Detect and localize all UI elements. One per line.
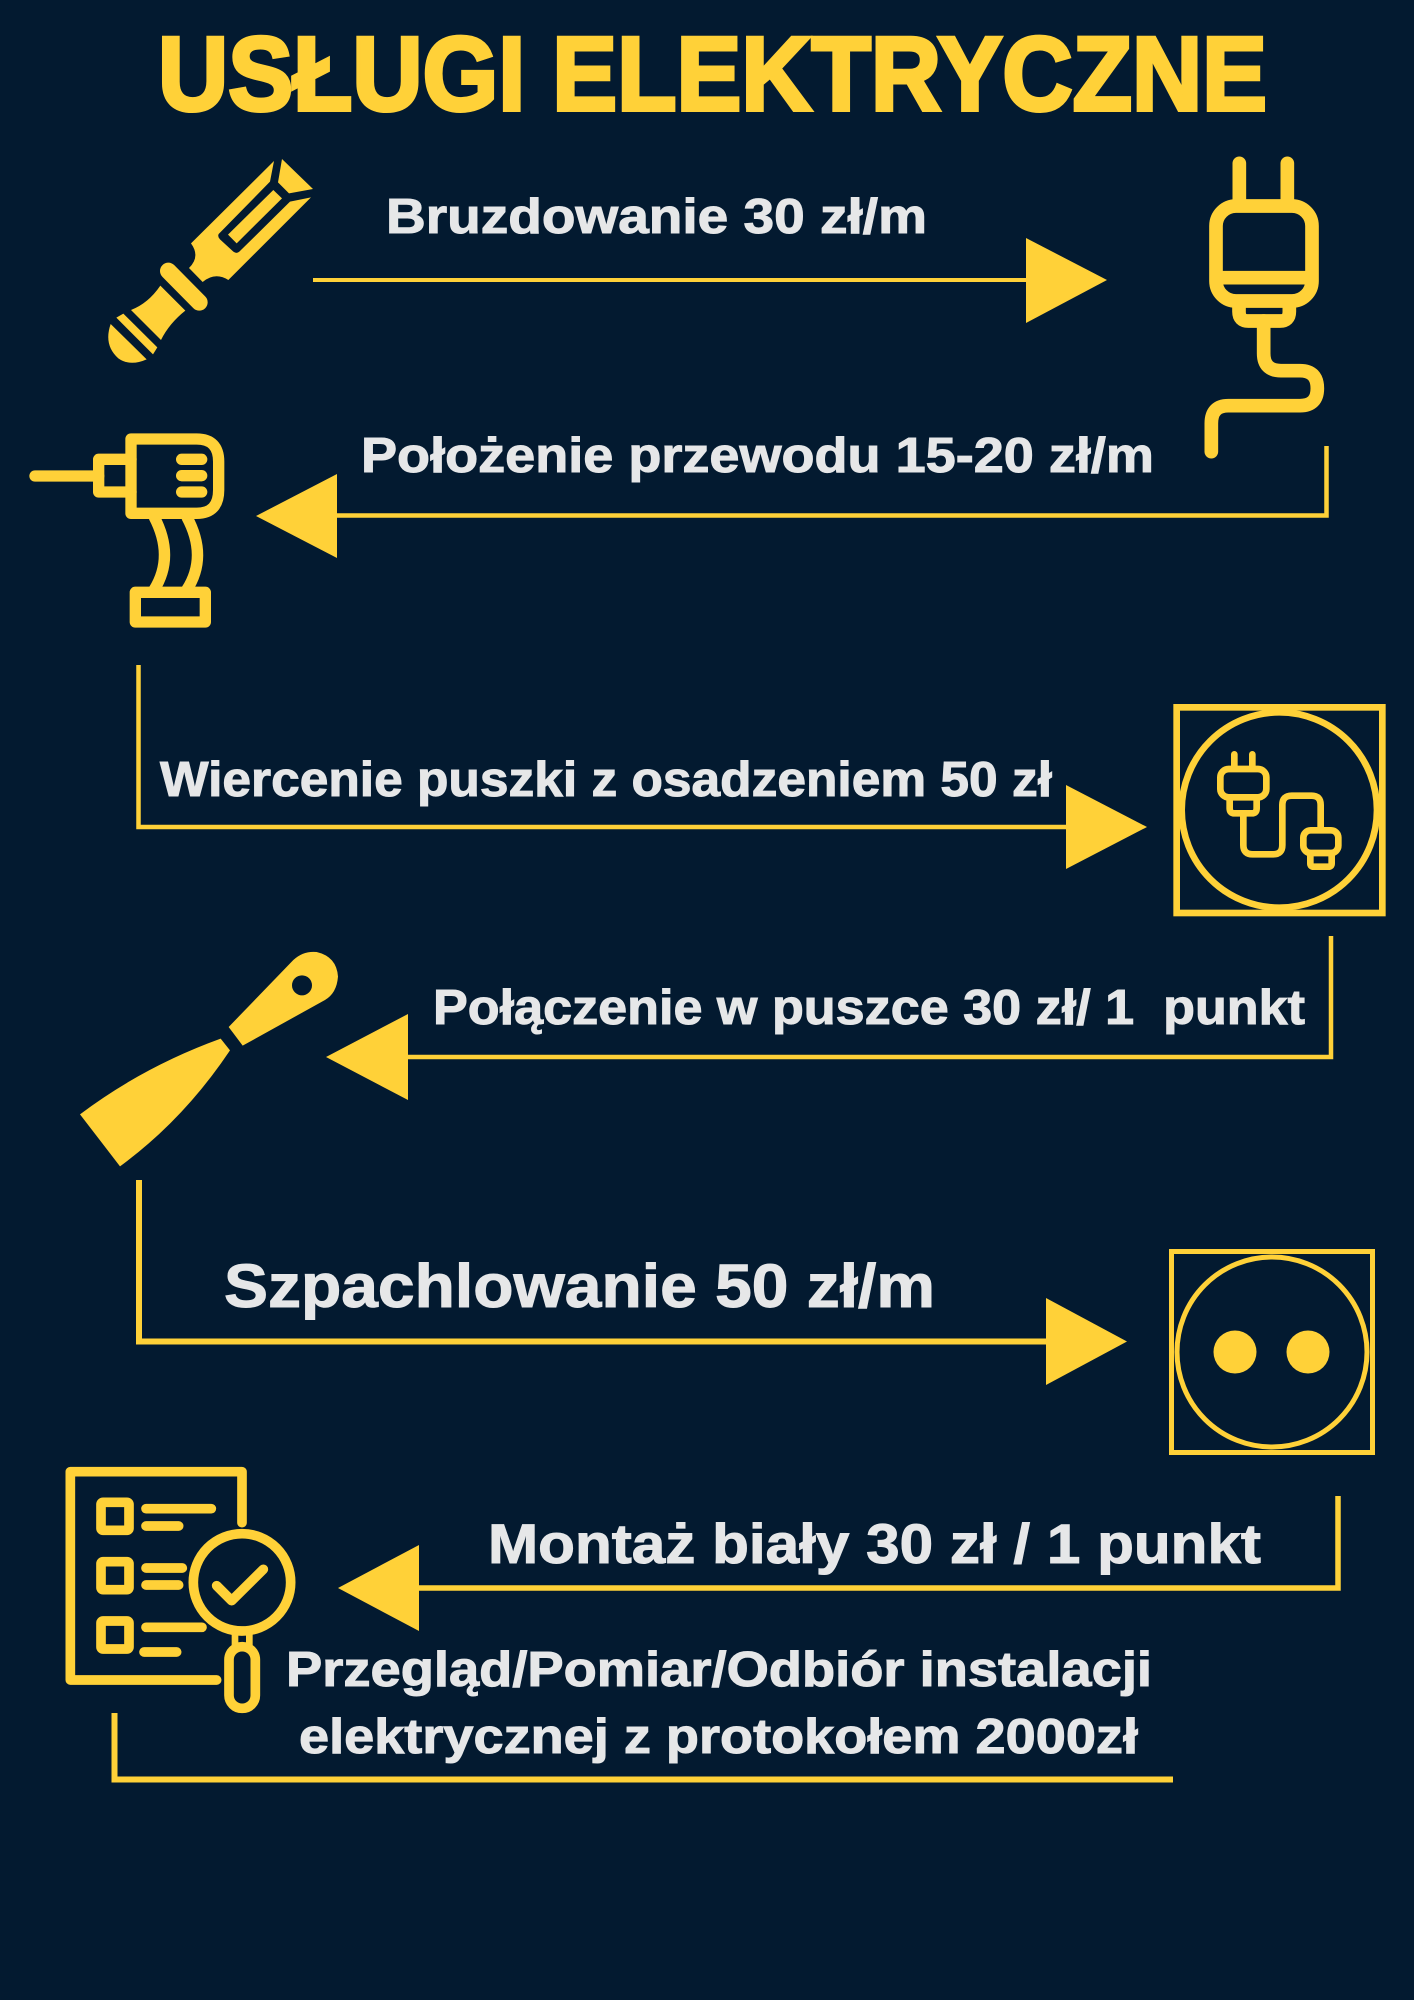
arrow: socket box to spatula (326, 936, 1331, 1100)
icon: chisel (108, 159, 313, 363)
icon: cable in a circle (1177, 707, 1382, 913)
icon: drill (35, 439, 219, 622)
text: Wiercenie puszki: Wiercenie puszki z osadzeniem 50 zł (160, 753, 1052, 807)
arrow: drill to socket box (138, 665, 1147, 869)
arrow: chisel to plug (313, 238, 1107, 323)
icon: spatula (80, 952, 338, 1166)
text: Przegląd: Przegląd/Pomiar/Odbiór instalacji (286, 1643, 1152, 1697)
text: Położenie przewodu: Położenie przewodu 15-20 zł/m (361, 429, 1154, 483)
text: Montaż biały: Montaż biały 30 zł / 1 punkt (488, 1512, 1261, 1575)
arrow: socket to checklist (338, 1496, 1338, 1631)
icon: wall socket (1172, 1252, 1372, 1452)
text: Połączenie w puszce: Połączenie w puszce 30 zł/ 1 punkt (433, 981, 1305, 1035)
icon: plug (1211, 163, 1317, 452)
text: elektrycznej: elektrycznej z protokołem 2000zł (299, 1710, 1138, 1764)
text: Szpachlowanie: Szpachlowanie 50 zł/m (224, 1252, 935, 1320)
text: Bruzdowanie: Bruzdowanie 30 zł/m (386, 190, 927, 244)
arrow: plug to drill (256, 446, 1326, 558)
arrow: spatula to socket (139, 1180, 1127, 1385)
icon: checklist with magnifier (70, 1472, 291, 1708)
line: closing connector (114, 1713, 1173, 1780)
title: USŁUGI ELEKTRYCZNE (158, 16, 1267, 133)
